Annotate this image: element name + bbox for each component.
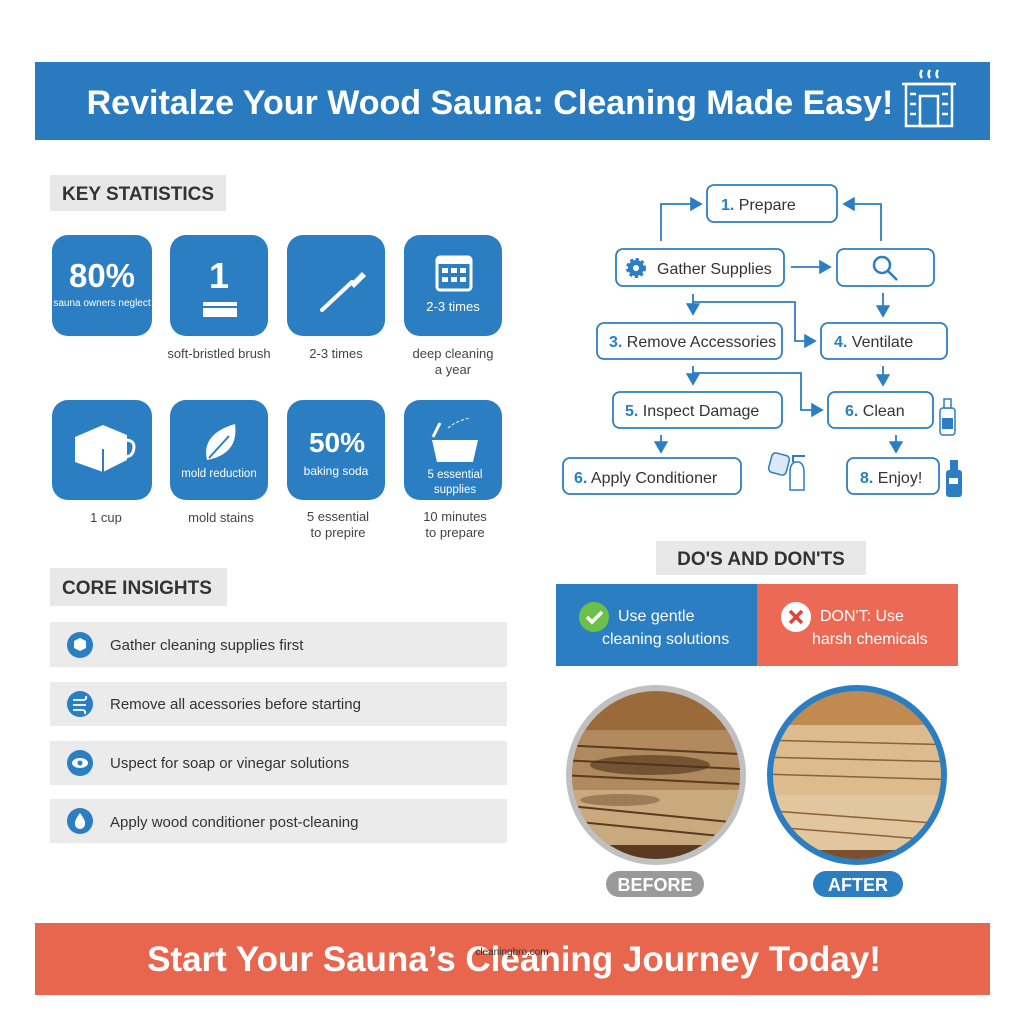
- tile 50%: baking soda: [304, 464, 369, 478]
- label: before: [606, 871, 704, 897]
- tile basket: 10 minutes: [423, 509, 487, 524]
- do box: cleaning solutions: [602, 631, 729, 648]
- tile brush: [287, 235, 385, 361]
- heading: do's and don'ts: DO'S AND DON'TS: [677, 549, 845, 570]
- insight 1: Gather cleaning supplies first: [110, 637, 304, 654]
- heading: core insights: CORE INSIGHTS: [62, 578, 212, 599]
- tile calendar: a year: [435, 362, 472, 377]
- insight 3: Uspect for soap or vinegar solutions: [110, 755, 349, 772]
- tile box: [52, 400, 152, 525]
- flow arrows: [661, 204, 896, 452]
- footer banner: Start Your Sauna’s Cleaning Journey Today!: [147, 940, 881, 979]
- tile 1 brush: [167, 235, 271, 361]
- label: before: BEFORE: [617, 875, 693, 895]
- flowchart: 1. Prepare: [721, 197, 796, 214]
- icon: bottle: [940, 399, 955, 435]
- photo: before: [566, 685, 746, 865]
- icon: sponge and spray: [768, 452, 805, 490]
- footer banner: cleaningbro.com: [475, 947, 549, 958]
- tile 50%: [287, 400, 385, 540]
- tile leaf: mold reduction: [181, 468, 257, 480]
- stat tiles: [52, 235, 502, 540]
- do box: Use gentle: [618, 608, 695, 625]
- flowchart: 3. Remove Accessories: [609, 334, 776, 351]
- flowchart: 6. Clean: [845, 403, 905, 420]
- icon: spray bottle: [946, 460, 962, 497]
- don't box: [757, 584, 958, 666]
- tile 80%: 80%: [69, 257, 135, 294]
- tile basket: [404, 400, 502, 540]
- label: after: AFTER: [828, 875, 888, 895]
- heading: key statistics: [50, 175, 226, 211]
- tile 80%: [52, 235, 152, 336]
- footer banner: [35, 923, 990, 995]
- insight 4: [50, 799, 507, 843]
- tile 50%: to prepire: [311, 525, 365, 540]
- tile calendar: [404, 235, 502, 377]
- tile basket: supplies: [434, 484, 476, 496]
- tile brush: 2-3 times: [309, 346, 363, 361]
- heading: do's and don'ts: [656, 541, 866, 575]
- flowchart: Gather Supplies: [657, 261, 772, 278]
- insight 2: [50, 682, 507, 726]
- flowchart: 4. Ventilate: [834, 334, 913, 351]
- photo: after: [767, 685, 947, 865]
- heading: core insights: [50, 568, 227, 606]
- flowchart: 8. Enjoy!: [860, 470, 922, 487]
- flowchart: 5. Inspect Damage: [625, 403, 759, 420]
- header banner: Revitalze Your Wood Sauna: Cleaning Made Easy!: [87, 84, 893, 122]
- tile 50%: 5 essential: [307, 509, 369, 524]
- tile box: 1 cup: [90, 510, 122, 525]
- insight rows: [50, 622, 507, 843]
- do box: [556, 584, 757, 666]
- insight 1: [50, 622, 507, 667]
- insight 2: Remove all acessories before starting: [110, 696, 361, 713]
- icon: sauna house: [902, 70, 956, 126]
- tile basket: 5 essential: [428, 469, 482, 481]
- tile basket: to prepare: [425, 525, 485, 540]
- insight 4: Apply wood conditioner post-cleaning: [110, 814, 358, 831]
- tile 50%: 50%: [309, 427, 365, 458]
- don't box: DON'T: Use: [820, 608, 904, 625]
- heading: key statistics: KEY STATISTICS: [62, 184, 214, 205]
- flowchart: 6. Apply Conditioner: [574, 470, 718, 487]
- flowchart: [563, 185, 962, 497]
- icon: magnifier: [874, 257, 897, 280]
- tile calendar: deep cleaning: [413, 346, 493, 361]
- tile 80%: sauna owners neglect: [53, 298, 151, 309]
- tile leaf: mold stains: [188, 510, 254, 525]
- tile 1 brush: 1: [209, 255, 229, 296]
- tile 1 brush: soft-bristled brush: [167, 346, 271, 361]
- icon: gear: [628, 260, 644, 276]
- insight 3: [50, 741, 507, 785]
- header banner: [35, 62, 990, 140]
- tile calendar: 2-3 times: [426, 299, 480, 314]
- tile leaf: [170, 400, 268, 525]
- label: after: [813, 871, 903, 897]
- don't box: harsh chemicals: [812, 631, 928, 648]
